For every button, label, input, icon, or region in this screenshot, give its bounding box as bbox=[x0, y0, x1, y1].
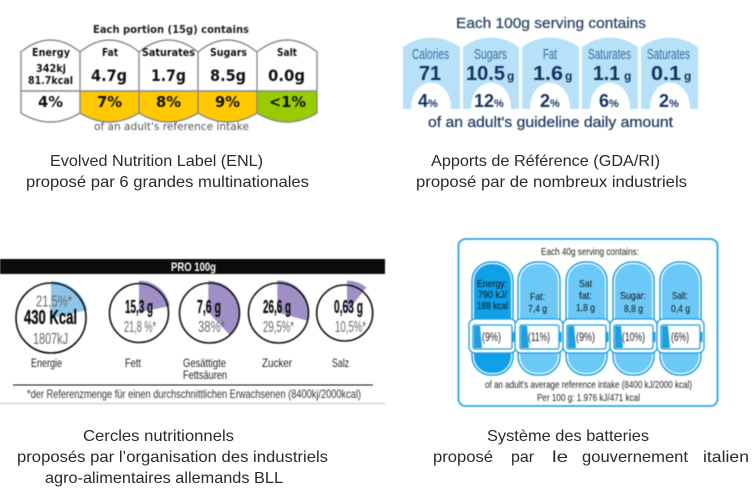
heading: each portion: Each portion (15g) contains bbox=[93, 24, 249, 36]
caption: GDA: proposé par de nombreux industriels bbox=[416, 174, 687, 191]
caption: Cercles: agro-alimentaires allemands BLL bbox=[45, 470, 283, 487]
battery percentages: (6%) bbox=[671, 332, 689, 344]
circle labels: Salz bbox=[332, 356, 349, 370]
battery nutrient text: 7,4 g bbox=[528, 303, 547, 315]
circle values: 15,3 g bbox=[125, 297, 153, 317]
battery heading: Each 40g serving contains: bbox=[541, 246, 639, 258]
GDA percentages: 12% bbox=[474, 91, 504, 111]
ENL nutrient names bbox=[32, 47, 297, 59]
GDA values: 71 bbox=[419, 63, 441, 85]
GDA values bbox=[419, 63, 691, 85]
battery nutrient text: fat: bbox=[579, 290, 592, 302]
ENL percentages: <1% bbox=[269, 93, 306, 111]
caption: ENL: Evolved Nutrition Label (ENL) bbox=[50, 153, 263, 170]
GDA values: g bbox=[624, 69, 631, 83]
circle percentages: 38%* bbox=[198, 319, 225, 336]
circle labels: Energie bbox=[31, 356, 62, 370]
energy values bbox=[24, 294, 77, 348]
GDA footnote: of an adult's guideline daily amount bbox=[428, 114, 674, 131]
caption: batteries: proposé bbox=[433, 449, 493, 466]
circle values: 0,63 g bbox=[334, 297, 363, 317]
GDA values: 0.1 bbox=[651, 63, 681, 85]
circle percentages: 10,5%* bbox=[335, 319, 366, 336]
GDA nutrient names: Calories bbox=[412, 46, 449, 63]
circle labels: Gesättigte bbox=[183, 356, 226, 370]
ENL values bbox=[28, 63, 305, 87]
reference footnote: *der Referenzmenge für einen durchschnittlichen Erwachsenen (8400kj/2000kcal) bbox=[27, 387, 361, 401]
battery nutrient text: Salt: bbox=[672, 290, 688, 302]
GDA nutrient names: Fat bbox=[543, 46, 558, 63]
ENL percentages: 7% bbox=[97, 93, 122, 111]
ENL values: 8.5g bbox=[210, 66, 246, 85]
caption: batteries: par bbox=[511, 449, 535, 466]
ENL percentages: 8% bbox=[156, 93, 181, 111]
ENL values: 342kj bbox=[36, 63, 66, 75]
ENL percentages: 9% bbox=[215, 93, 240, 111]
pie wedges bbox=[51, 280, 366, 335]
ENL nutrient names: Energy bbox=[32, 47, 70, 59]
GDA values: 1.6 bbox=[533, 63, 563, 85]
caption: Cercles: Cercles nutritionnels bbox=[83, 428, 234, 445]
panel: Guideline Daily Amounts bbox=[403, 16, 698, 131]
ENL nutrient names: Fat bbox=[102, 47, 118, 59]
circle labels: Zucker bbox=[262, 356, 292, 370]
black header bar bbox=[0, 259, 385, 274]
GDA percentages: 2% bbox=[659, 91, 679, 111]
circle values: 7,6 g bbox=[197, 297, 221, 317]
battery column fills bbox=[474, 264, 699, 373]
circle percentages bbox=[124, 319, 366, 336]
caption: ENL bbox=[26, 153, 309, 191]
battery bodies bbox=[473, 325, 700, 349]
GDA values: 10.5 bbox=[466, 63, 505, 85]
battery nutrient text: 1,8 g bbox=[576, 302, 595, 314]
circle values bbox=[125, 297, 363, 317]
battery percentages: (10%) bbox=[622, 332, 645, 344]
battery charge levels bbox=[474, 326, 702, 348]
battery percentages: (9%) bbox=[482, 332, 501, 344]
battery nutrient text: Sat bbox=[579, 278, 592, 290]
ENL values: 81.7kcal bbox=[28, 75, 73, 87]
battery percentages bbox=[482, 332, 689, 344]
caption: batteries: le bbox=[552, 449, 568, 466]
caption: ENL: proposé par 6 grandes multinationales bbox=[26, 174, 309, 191]
battery nutrient text: 0,4 g bbox=[671, 303, 690, 315]
circle values: 26,6 g bbox=[263, 297, 291, 317]
GDA heading: Each 100g serving contains bbox=[456, 16, 646, 32]
ENL cell outlines bbox=[21, 40, 317, 122]
battery footnotes bbox=[485, 379, 692, 404]
circle percentages: 29,5%* bbox=[263, 319, 294, 336]
GDA percentages: 4% bbox=[418, 91, 438, 111]
battery column outlines bbox=[472, 262, 701, 375]
battery footnotes: of an adult's average reference intake (8400 kJ/2000 kcal) bbox=[485, 379, 692, 391]
GDA percentages: 2% bbox=[540, 91, 560, 111]
ENL footnote: of an adult's reference intake bbox=[94, 121, 249, 133]
battery percentages: (9%) bbox=[576, 332, 595, 344]
battery bands bbox=[469, 319, 704, 353]
battery nutrient text: 188 kcal bbox=[477, 300, 508, 312]
panel: Evolved Nutrition Label bbox=[21, 24, 317, 133]
ENL nutrient names: Sugars bbox=[210, 47, 247, 59]
ENL values: 0.0g bbox=[268, 66, 305, 85]
battery nutrient text bbox=[477, 278, 690, 315]
caption: batteries bbox=[433, 428, 749, 466]
panel: Système des batteries bbox=[458, 239, 718, 406]
caption: batteries: gouvernement bbox=[582, 449, 689, 466]
panel: Cercles nutritionnels bbox=[0, 259, 385, 404]
battery footnotes: Per 100 g: 1.976 kJ/471 kcal bbox=[537, 392, 640, 404]
energy values: 1807kJ bbox=[33, 331, 68, 348]
outer frame bbox=[458, 239, 718, 406]
battery nutrient text: Sugar: bbox=[620, 290, 646, 302]
GDA values: g bbox=[507, 69, 514, 83]
GDA percentages bbox=[418, 91, 679, 111]
battery nutrient text: Fat: bbox=[530, 291, 545, 303]
GDA white percent arches bbox=[411, 83, 690, 109]
GDA values: g bbox=[565, 69, 572, 83]
caption: Cercles bbox=[17, 428, 328, 487]
ENL nutrient names: Saturates bbox=[142, 47, 195, 59]
battery nutrient text: 790 kJ/ bbox=[478, 289, 507, 301]
GDA values: g bbox=[684, 69, 691, 83]
caption: batteries: Système des batteries bbox=[487, 428, 649, 445]
caption: GDA bbox=[416, 153, 687, 191]
ENL coloured lower cells bbox=[80, 91, 317, 122]
battery nutrient text: 8,8 g bbox=[624, 303, 643, 315]
ENL percentages: 4% bbox=[38, 93, 63, 111]
battery percentages: (11%) bbox=[528, 332, 550, 344]
circle labels: Fettsäuren bbox=[183, 368, 227, 382]
GDA nutrient names: Sugars bbox=[474, 46, 507, 63]
circle outlines bbox=[16, 283, 373, 353]
GDA blue cells bbox=[403, 38, 698, 109]
GDA nutrient names bbox=[412, 46, 690, 63]
GDA nutrient names: Saturates bbox=[647, 46, 690, 63]
caption: GDA: Apports de Référence (GDA/RI) bbox=[431, 153, 660, 170]
ENL values: 1.7g bbox=[151, 66, 186, 85]
caption: batteries: italien bbox=[703, 449, 749, 466]
energy values: 21,5%* bbox=[36, 294, 72, 310]
ENL percentages bbox=[38, 93, 306, 111]
circle labels: Fett bbox=[125, 356, 142, 370]
energy values: 430 Kcal bbox=[24, 307, 77, 329]
caption: Cercles: proposés par l’organisation des industriels bbox=[17, 449, 328, 466]
battery nutrient text: Energy: bbox=[477, 278, 507, 290]
black header bar: PRO 100g bbox=[171, 260, 216, 274]
GDA percentages: 6% bbox=[599, 91, 619, 111]
ENL values: 4.7g bbox=[91, 66, 127, 85]
circle percentages: 21,8 %* bbox=[124, 319, 156, 336]
GDA nutrient names: Saturates bbox=[588, 46, 631, 63]
ENL nutrient names: Salt bbox=[277, 47, 297, 59]
circle labels bbox=[31, 356, 349, 382]
GDA values: 1.1 bbox=[593, 63, 620, 85]
